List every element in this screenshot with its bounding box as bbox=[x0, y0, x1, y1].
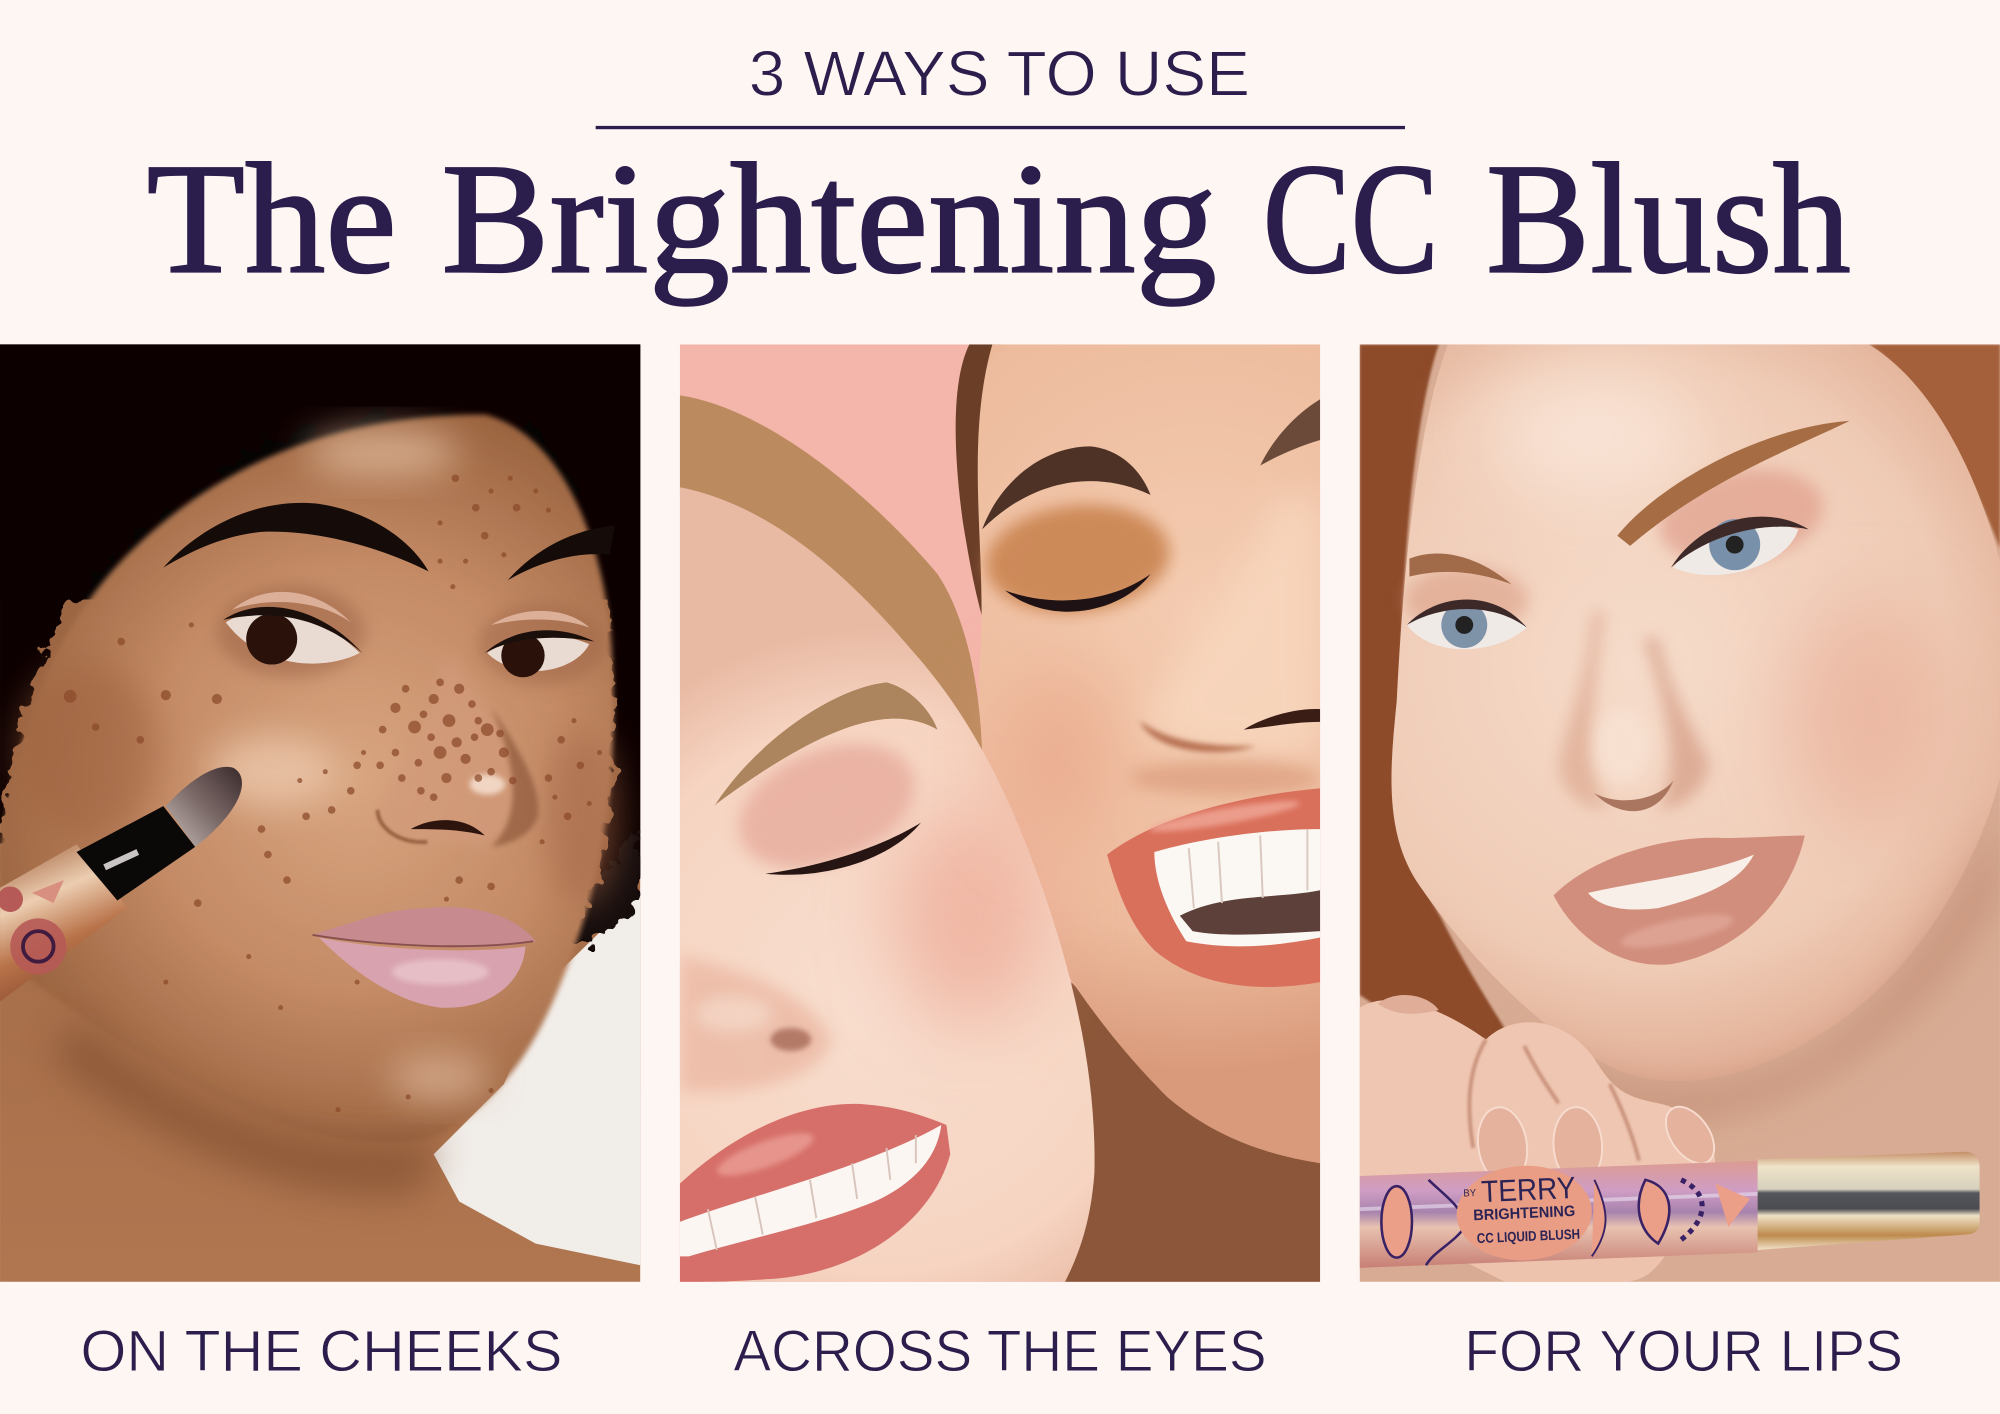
panel: for your lips photo bbox=[1360, 344, 2000, 1282]
left lips bbox=[680, 1104, 950, 1282]
jaw shadow bbox=[1518, 816, 2000, 1123]
nose bbox=[374, 714, 540, 848]
right woman face bbox=[978, 344, 1320, 1163]
dark hair lower right bbox=[1065, 982, 1320, 1282]
eye left bbox=[217, 585, 365, 677]
label: across the eyes: ACROSS THE EYES bbox=[733, 1319, 1267, 1384]
product label: BRIGHTENING bbox=[1473, 1203, 1576, 1224]
title: The Brightening CC Blush: Brightening bbox=[441, 132, 1217, 307]
eyebrow right bbox=[508, 525, 615, 580]
product label bbox=[1455, 1163, 1594, 1263]
nail 3 bbox=[1656, 1098, 1724, 1172]
brush applicator bbox=[0, 767, 242, 1001]
nail 2 bbox=[1551, 1106, 1605, 1185]
forehead highlight bbox=[1486, 370, 1703, 497]
right nose bbox=[1129, 497, 1320, 796]
right brow bbox=[1617, 421, 1849, 546]
title: The Brightening CC Blush: The bbox=[147, 132, 397, 307]
nose bbox=[1559, 612, 1709, 811]
skin highlights bbox=[19, 430, 616, 1101]
panel: on the cheeks photo bbox=[0, 319, 676, 1282]
right eye bbox=[1671, 517, 1809, 575]
face bbox=[0, 415, 613, 1143]
left brow bbox=[714, 682, 938, 806]
left eye bbox=[1407, 599, 1527, 649]
label: for your lips: FOR YOUR LIPS bbox=[1464, 1319, 1903, 1384]
panel: across the eyes photo bbox=[680, 344, 1320, 1282]
right outer brow bbox=[1260, 399, 1320, 466]
subtitle: 3 ways to use: 3 WAYS TO USE bbox=[749, 38, 1250, 110]
hair bbox=[0, 319, 676, 950]
product label: TERRY bbox=[1480, 1171, 1576, 1209]
product label: BY bbox=[1463, 1188, 1477, 1199]
lips bbox=[1554, 835, 1805, 965]
blush left bbox=[890, 810, 1048, 1027]
right closed lash bbox=[1005, 574, 1151, 612]
product label: CC LIQUID BLUSH bbox=[1476, 1226, 1580, 1246]
cheek blush bbox=[1786, 599, 1952, 829]
right lips bbox=[1107, 788, 1320, 987]
face bbox=[1391, 344, 2000, 1081]
left woman hair bbox=[680, 395, 982, 753]
lips bbox=[313, 907, 536, 1008]
auburn hair left bbox=[1360, 344, 1511, 1059]
title: The Brightening CC Blush: Blush bbox=[1486, 132, 1851, 307]
eye right bbox=[478, 603, 606, 685]
label: on the cheeks: ON THE CHEEKS bbox=[80, 1319, 563, 1384]
eyebrow left bbox=[163, 503, 429, 571]
product tube bbox=[1360, 1152, 1980, 1268]
left eyeshadow bbox=[1406, 566, 1528, 633]
right woman hair bbox=[956, 344, 1001, 616]
left brow bbox=[1409, 553, 1511, 584]
left nose bbox=[680, 957, 832, 1092]
right brow bbox=[982, 446, 1151, 529]
neck shadow bbox=[51, 1020, 440, 1196]
right eyeshadow bbox=[981, 496, 1175, 622]
nail 1 bbox=[1473, 1104, 1532, 1187]
right eyeshadow bbox=[1651, 457, 1831, 576]
auburn hair right bbox=[1869, 344, 2000, 548]
left eyeshadow bbox=[720, 720, 933, 893]
left closed lash bbox=[765, 823, 921, 875]
blush right bbox=[1001, 663, 1116, 842]
hand bbox=[1360, 995, 1724, 1199]
freckles bbox=[64, 474, 602, 1112]
left woman face bbox=[680, 487, 1095, 1282]
title: The Brightening CC Blush: CC bbox=[1263, 132, 1439, 307]
heading rule bbox=[596, 126, 1405, 129]
lower thumb bbox=[1467, 1256, 1665, 1282]
